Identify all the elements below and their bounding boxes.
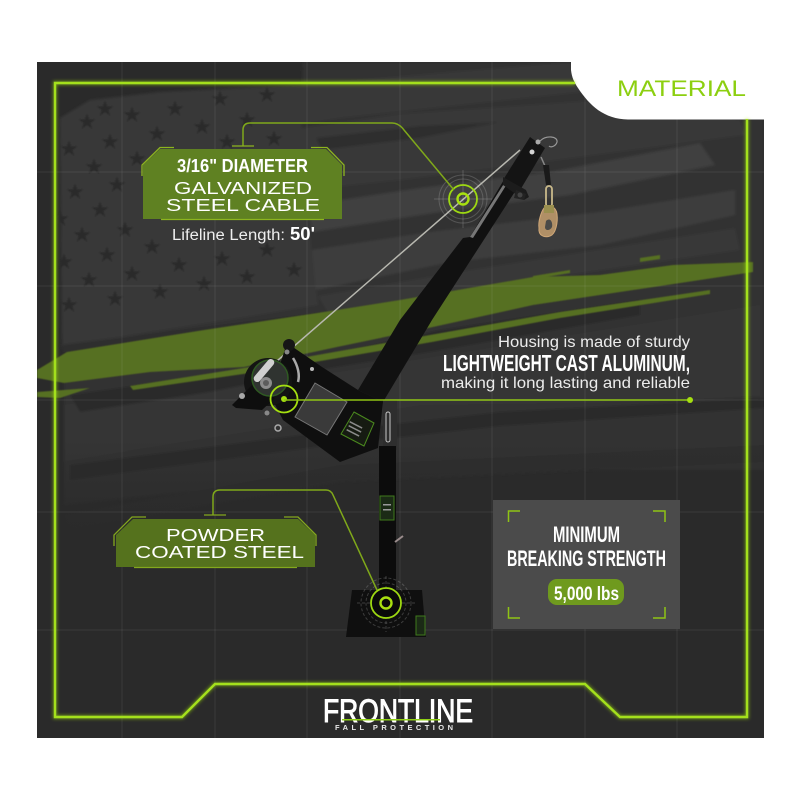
corner brackets xyxy=(508,511,665,618)
connector line xyxy=(243,123,454,190)
logo tagline: FALL PROTECTION xyxy=(335,723,453,732)
callout title line 1: GALVANIZED xyxy=(174,178,312,198)
housing text line 2: LIGHTWEIGHT CAST ALUMINUM, xyxy=(443,350,690,376)
flag stars xyxy=(52,87,302,312)
strength value pill xyxy=(548,579,624,605)
logo: frontline fall protection: FRONTLINE xyxy=(323,693,473,729)
white corner tab xyxy=(571,60,766,120)
davit arm equipment xyxy=(232,137,557,637)
olive paint streak xyxy=(37,255,753,398)
lifeline length: Lifeline Length: xyxy=(172,227,285,244)
callout title line 1: POWDER xyxy=(166,525,265,545)
callout title line 2: STEEL CABLE xyxy=(166,195,320,215)
callout plate xyxy=(116,519,315,567)
lifeline length: 50' xyxy=(290,224,315,244)
boom arm xyxy=(358,137,557,402)
logo underline xyxy=(342,719,440,720)
post and base plate xyxy=(346,400,426,637)
target: cable xyxy=(434,170,492,228)
bottom fade xyxy=(37,440,764,540)
callout: housing material xyxy=(284,334,693,403)
connector line xyxy=(213,490,377,590)
infographic canvas xyxy=(37,62,764,738)
strength value: 5,000 lbs xyxy=(554,584,619,605)
leader end dot xyxy=(687,397,693,403)
callout heading: 3/16" DIAMETER xyxy=(177,156,308,176)
faint grid xyxy=(37,62,764,738)
neon frame xyxy=(55,83,747,717)
panel: minimum breaking strength xyxy=(493,500,680,629)
callout: powder coated steel xyxy=(114,490,377,590)
strength heading line 2: BREAKING STRENGTH xyxy=(507,546,666,571)
snap hook and lanyard xyxy=(539,157,557,237)
target: housing xyxy=(270,386,298,412)
housing text line 1: Housing is made of sturdy xyxy=(498,334,690,351)
housing text line 3: making it long lasting and reliable xyxy=(441,375,690,392)
leader line xyxy=(284,399,690,401)
distressed flag background xyxy=(37,62,764,738)
winch housing xyxy=(232,339,299,431)
lifeline length xyxy=(172,224,315,244)
callout: galvanized steel cable xyxy=(142,123,454,220)
section label: material: MATERIAL xyxy=(617,76,746,101)
mast frame xyxy=(270,343,383,462)
dark background panel xyxy=(37,62,764,738)
strength heading line 1: MINIMUM xyxy=(553,522,620,547)
callout plate xyxy=(143,149,342,219)
callout title line 2: COATED STEEL xyxy=(135,542,304,562)
target: base xyxy=(357,576,415,632)
cable line xyxy=(262,150,520,374)
